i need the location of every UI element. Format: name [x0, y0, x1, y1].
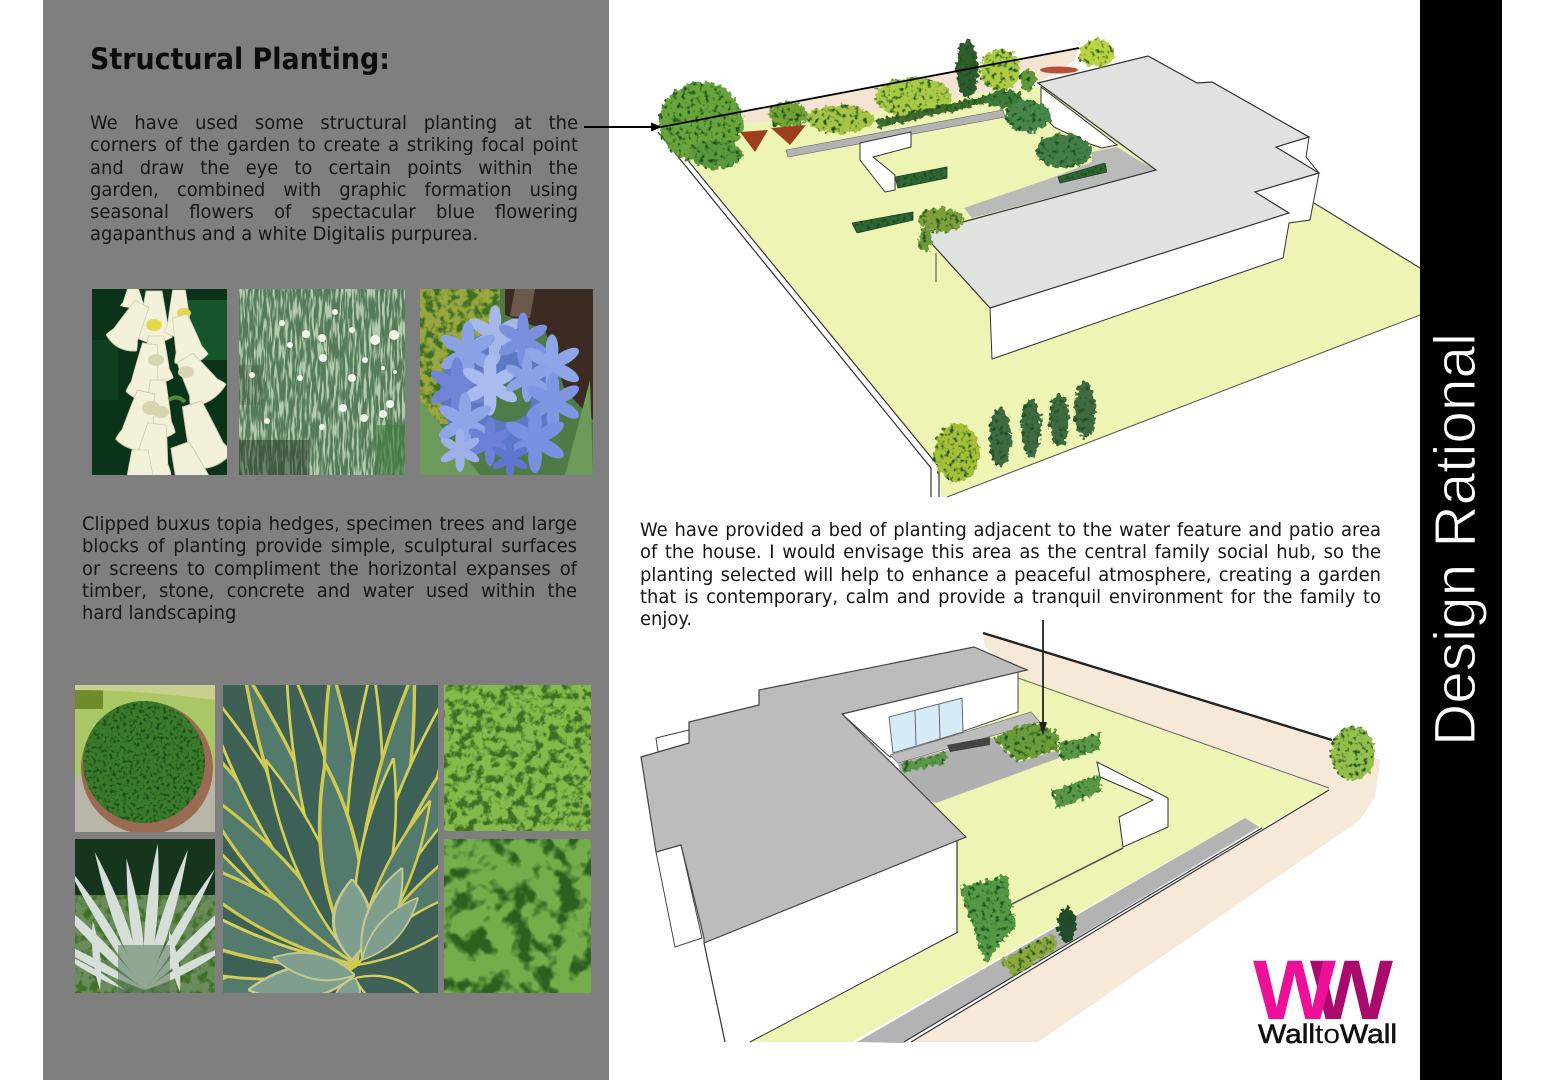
top sketch: side wall lines	[658, 130, 939, 497]
top sketch: inner house wall	[1041, 87, 1117, 148]
logo wordmark: WalltoWall	[1258, 1019, 1397, 1049]
text block: clipped buxus hedges	[82, 513, 578, 624]
top sketch: lawn	[668, 87, 1420, 497]
photo: bright green palmate foliage	[444, 685, 591, 831]
bottom sketch: sand paving	[911, 633, 1380, 1042]
bottom sketch: patio	[898, 738, 1059, 803]
bottom sketch: house back wall	[842, 670, 1018, 757]
text block: structural planting intro: corners of the garden to create a striking focal point	[90, 134, 578, 156]
text block: structural planting intro: and draw the eye to certain points within the	[90, 157, 578, 179]
text block: structural planting intro: We have used some structural planting at the	[90, 112, 578, 134]
photo: variegated yucca	[223, 685, 438, 993]
bottom sketch: hedges and planting	[901, 722, 1375, 977]
top sketch: back boundary line	[661, 48, 1079, 127]
panel: black side bar	[1420, 0, 1502, 1080]
photo: white spiky phormium	[75, 839, 215, 993]
text block: clipped buxus hedges: Clipped buxus topia hedges, specimen trees and large	[82, 513, 577, 535]
text block: planting bed description	[640, 519, 1381, 630]
bottom sketch: house roof	[641, 647, 1027, 943]
photo: ornamental grass	[239, 289, 405, 475]
text block: clipped buxus hedges: timber, stone, concrete and water used within the	[82, 580, 577, 602]
logo mark: W	[1253, 943, 1337, 1037]
photo: fatsia leaves	[444, 839, 591, 993]
text block: planting bed description: that is contemporary, calm and provide a tranquil environment for the family to	[640, 586, 1381, 608]
logo mark: W	[1310, 943, 1394, 1037]
photo: clipped buxus ball	[75, 685, 215, 832]
bottom garden sketch	[641, 633, 1380, 1043]
bottom sketch: grey strip	[857, 818, 1259, 1043]
heading: Structural Planting:	[90, 42, 390, 76]
side bar title: Design Rational	[1423, 333, 1488, 746]
bottom sketch: lawn	[750, 675, 1328, 1042]
text block: clipped buxus hedges: or screens to compliment the horizontal expanses of	[82, 558, 577, 580]
logo mark	[1253, 943, 1394, 1037]
text block: clipped buxus hedges: hard landscaping	[82, 602, 236, 624]
top sketch: red plants	[740, 66, 1078, 152]
callout arrow: bottom sketch	[1039, 620, 1047, 736]
photo: blue agapanthus	[420, 289, 593, 475]
photo: white foxglove	[92, 289, 227, 475]
top sketch: path strip	[786, 110, 1005, 157]
text block: structural planting intro: seasonal flowers of spectacular blue flowering	[90, 201, 578, 223]
top sketch: house walls	[990, 137, 1319, 359]
text block: planting bed description: of the house. I would envisage this area as the central family social hub, so the	[640, 541, 1381, 563]
panel: grey left column	[43, 0, 609, 1080]
top sketch: patio strip	[964, 147, 1156, 218]
text block: structural planting intro	[90, 112, 578, 245]
callout arrow: top sketch	[584, 122, 662, 132]
top garden sketch	[658, 39, 1420, 497]
bottom sketch: back wall line	[983, 633, 1332, 740]
top sketch: back fence band	[661, 48, 1079, 127]
text block: structural planting intro: agapanthus and a white Digitalis purpurea.	[90, 223, 478, 245]
text block: planting bed description: enjoy.	[640, 608, 692, 630]
top sketch: house roof	[922, 56, 1319, 308]
bottom sketch: window	[889, 698, 963, 753]
logo: Wall to Wall	[1253, 943, 1397, 1049]
bottom sketch: house wall line	[704, 838, 957, 1042]
text block: clipped buxus hedges: blocks of planting provide simple, sculptural surfaces	[82, 535, 577, 557]
text block: planting bed description: planting selected will help to enhance a peaceful atmosphere, creating a garden	[640, 564, 1381, 586]
text block: planting bed description: We have provided a bed of planting adjacent to the water feature and patio area	[640, 519, 1381, 541]
top sketch: hedges	[852, 163, 1107, 233]
bottom sketch: side extension wall	[656, 845, 702, 947]
top sketch: planting	[659, 39, 1115, 482]
top sketch: U-shaped seating wall	[860, 132, 911, 192]
text block: structural planting intro: garden, combined with graphic formation using	[90, 179, 578, 201]
bottom sketch: U-shaped wall	[1097, 762, 1168, 847]
